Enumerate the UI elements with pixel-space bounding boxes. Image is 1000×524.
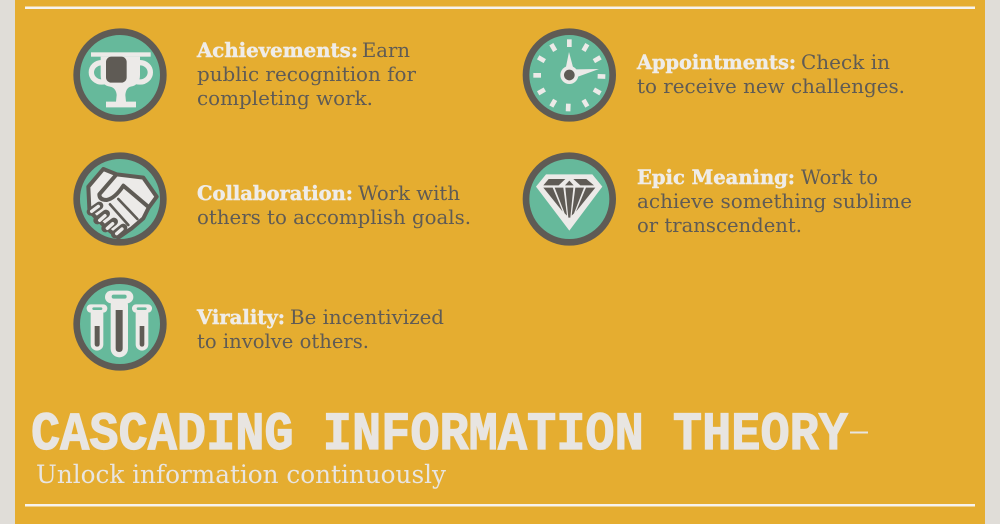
heading: appointments: Appointments: bbox=[636, 51, 796, 74]
icon: trophy bbox=[77, 32, 163, 118]
icon: handshake bbox=[77, 156, 163, 242]
heading: achievements: Achievements: bbox=[196, 39, 358, 62]
text: virality description bbox=[197, 306, 444, 353]
icon: diamond bbox=[526, 156, 613, 242]
heading: epic meaning: Epic Meaning: bbox=[637, 166, 795, 189]
text: epic meaning description: or transcendent. bbox=[637, 214, 802, 237]
panel: appointments bbox=[526, 32, 905, 118]
text: achievements description: Earn bbox=[362, 39, 410, 62]
text: appointments description bbox=[637, 51, 905, 98]
text: virality description: to involve others. bbox=[197, 330, 369, 353]
text: collaboration description: Work with bbox=[358, 182, 460, 205]
text: appointments description: Check in bbox=[801, 51, 890, 74]
panel: collaboration bbox=[77, 156, 471, 242]
heading: collaboration: Collaboration: bbox=[197, 182, 353, 205]
panel: epic meaning bbox=[526, 156, 912, 242]
subtitle: Unlock information continuously bbox=[36, 460, 447, 489]
icon: test tubes bbox=[77, 281, 163, 367]
text: achievements description: public recognition for bbox=[197, 63, 417, 86]
text: epic meaning description bbox=[637, 166, 912, 237]
text: achievements description bbox=[197, 39, 417, 110]
text: virality description: Be incentivized bbox=[290, 306, 444, 329]
text: epic meaning description: Work to bbox=[801, 166, 878, 189]
panel: virality bbox=[77, 281, 444, 367]
title dash bbox=[850, 432, 868, 434]
text: appointments description: to receive new challenges. bbox=[637, 75, 905, 98]
text: collaboration description: others to accomplish goals. bbox=[197, 206, 471, 229]
title: CASCADING INFORMATION THEORY bbox=[31, 405, 849, 466]
text: achievements description: completing work. bbox=[197, 87, 373, 110]
icon: clock bbox=[526, 32, 613, 118]
text: epic meaning description: achieve something sublime bbox=[637, 190, 912, 213]
text: collaboration description bbox=[197, 182, 471, 229]
panel: achievements bbox=[77, 32, 417, 118]
heading: virality: Virality: bbox=[196, 306, 285, 329]
